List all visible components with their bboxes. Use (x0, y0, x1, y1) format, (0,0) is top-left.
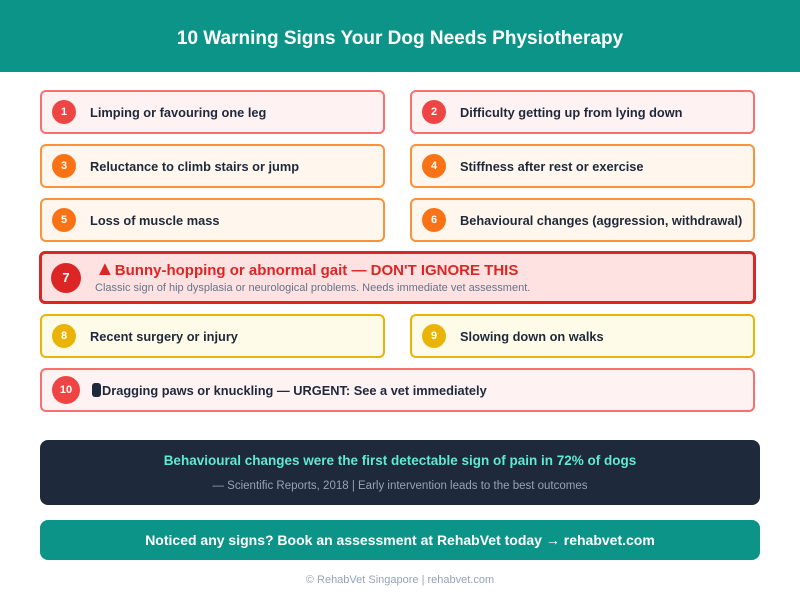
stat box (40, 440, 760, 505)
card 7 highlighted (39, 251, 756, 304)
header: 10 Warning Signs Your Dog Needs Physiotherapy (177, 28, 623, 49)
card 4: Stiffness after rest or exercise (460, 158, 644, 174)
stat box: — Scientific Reports, 2018 | Early intervention leads to the best outcomes (212, 480, 588, 492)
stat box: Behavioural changes were the first detectable sign of pain in 72% of dogs (164, 453, 636, 468)
card 9: 9 (431, 330, 437, 342)
card 6: Behavioural changes (aggression, withdrawal) (460, 212, 742, 228)
card 4 (410, 144, 755, 188)
card 8 (40, 314, 385, 358)
card 5 (40, 198, 385, 242)
card 6: 6 (431, 214, 437, 226)
card 7 highlighted: 7 (62, 270, 70, 285)
footer: © RehabVet Singapore | rehabvet.com (306, 574, 494, 586)
card 4: 4 (431, 160, 437, 172)
card 9: Slowing down on walks (460, 328, 604, 344)
card 1: 1 (61, 106, 67, 118)
card 3: Reluctance to climb stairs or jump (90, 158, 299, 174)
header (0, 0, 800, 72)
CTA: Noticed any signs? Book an assessment at RehabVet today → rehabvet.com (145, 532, 655, 548)
card 1: Limping or favouring one leg (90, 104, 266, 120)
card 3 (40, 144, 385, 188)
card 1 (40, 90, 385, 134)
CTA (40, 520, 760, 560)
card 2 (410, 90, 755, 134)
card 5: 5 (61, 214, 67, 226)
card 8: 8 (61, 330, 67, 342)
card 2: 2 (431, 106, 437, 118)
card 6 (410, 198, 755, 242)
card 7 highlighted: ▲Bunny-hopping or abnormal gait — DON'T IGNORE THIS (95, 258, 518, 280)
card 8: Recent surgery or injury (90, 328, 238, 344)
card 10 (40, 368, 755, 412)
card 2: Difficulty getting up from lying down (460, 104, 683, 120)
card 3: 3 (61, 160, 67, 172)
card 9 (410, 314, 755, 358)
card 7 highlighted: Classic sign of hip dysplasia or neurological problems. Needs immediate vet assessment. (95, 282, 530, 294)
card 10: 10 (60, 384, 72, 396)
card 5: Loss of muscle mass (90, 212, 219, 228)
card 10: Dragging paws or knuckling — URGENT: See a vet immediately (102, 382, 487, 398)
